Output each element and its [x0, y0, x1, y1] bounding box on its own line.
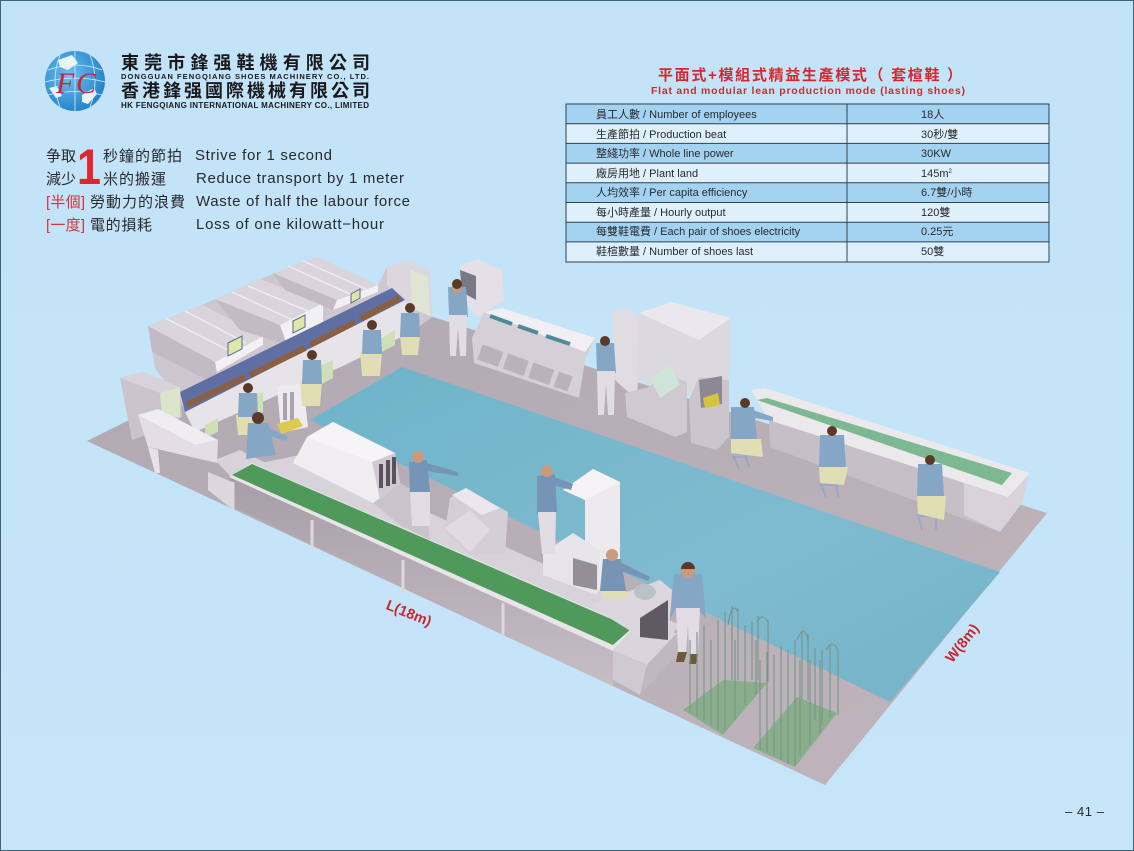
specification table: 員工人數 / Number of employees: [596, 107, 757, 121]
icon: FC globe logo: F: [55, 67, 75, 100]
long green belt conveyor: [208, 455, 680, 695]
specification table: 2: [949, 169, 953, 175]
specification table: 0.25元: [921, 226, 953, 238]
slogan text block: Reduce transport by 1 meter: [196, 170, 404, 187]
slogan text block: [一度]: [46, 217, 85, 234]
slogan text block: 秒鐘的節拍: [103, 147, 182, 165]
rack 1: [683, 606, 768, 735]
rack 2: [753, 631, 838, 767]
operators: [236, 279, 946, 664]
conveyor with shoe trays: [180, 288, 415, 438]
specification table: 30KW: [921, 148, 952, 160]
chart title: [651, 66, 965, 97]
company names: [121, 52, 370, 110]
specification table: 每小時產量 / Hourly output: [596, 205, 726, 219]
icon: FC globe logo: [45, 51, 105, 111]
specification table: 50雙: [921, 245, 944, 258]
machines: top right line: [460, 259, 731, 450]
specification table: 廠房用地 / Plant land: [596, 166, 698, 180]
shoe last racks: [683, 606, 838, 767]
company names: HK FENGQIANG INTERNATIONAL MACHINERY CO., LIMITED: [121, 101, 369, 110]
standing operators: [409, 279, 706, 664]
slogan text block: [46, 139, 410, 234]
company names: DONGGUAN FENGQIANG SHOES MACHINERY CO., LTD.: [121, 72, 369, 81]
company names: 香港鋒强國際機械有限公司: [121, 80, 370, 101]
specification table: 6.7雙/小時: [921, 186, 972, 199]
slogan text block: Waste of half the labour force: [196, 193, 410, 210]
right green conveyor bench: [751, 388, 1030, 532]
width dimension label: W(8m): [943, 621, 983, 666]
slogan text block: 減少: [46, 171, 76, 188]
specification table: 120雙: [921, 206, 950, 219]
seated operators at back left: [236, 303, 420, 459]
chart title: Flat and modular lean production mode (lasting shoes): [651, 85, 965, 97]
slogan text block: 1: [77, 139, 101, 195]
specification table: 生產節拍 / Production beat: [596, 127, 726, 141]
slogan text block: 勞動力的浪費: [90, 194, 185, 211]
specification table: 每雙鞋電費 / Each pair of shoes electricity: [596, 224, 801, 238]
machine: tall white pillar unit: [543, 469, 620, 595]
factory floor: [87, 295, 1047, 785]
company logo header: [45, 51, 370, 111]
machines: three press units at back left: [148, 257, 432, 430]
icon: FC globe logo: C: [76, 67, 97, 100]
specification table: 30秒/雙: [921, 127, 958, 141]
specification table: 鞋楦數量 / Number of shoes last: [596, 244, 753, 258]
machine: seated workstation: [590, 580, 672, 640]
specification table: [566, 104, 1049, 262]
slogan text block: [半個]: [46, 194, 85, 211]
slogan text block: Strive for 1 second: [195, 147, 332, 164]
specification table: 145m: [921, 168, 949, 180]
machine: small press unit: [445, 488, 508, 555]
specification table: 18人: [921, 108, 944, 121]
slogan text block: 争取: [46, 147, 76, 165]
slogan text block: 電的損耗: [90, 217, 152, 234]
seated operators at right bench: [731, 398, 946, 530]
slogan text block: 米的搬運: [103, 171, 166, 188]
specification table: 整綫功率 / Whole line power: [596, 146, 734, 160]
chart title: 平面式+模組式精益生產模式（ 套楦鞋 ）: [658, 66, 962, 84]
specification table: 人均效率 / Per capita efficiency: [596, 185, 748, 199]
company names: 東莞市鋒强鞋機有限公司: [121, 52, 370, 73]
teal central floor area: [310, 367, 1000, 702]
factory floor plan illustration: [87, 257, 1047, 785]
length dimension label: L(18m): [384, 598, 434, 630]
machine: white hood oven: [293, 422, 430, 540]
slogan text block: Loss of one kilowatt−hour: [196, 216, 384, 233]
machine: left feeding unit and bench: [120, 372, 308, 480]
page number: – 41 –: [1065, 804, 1105, 819]
